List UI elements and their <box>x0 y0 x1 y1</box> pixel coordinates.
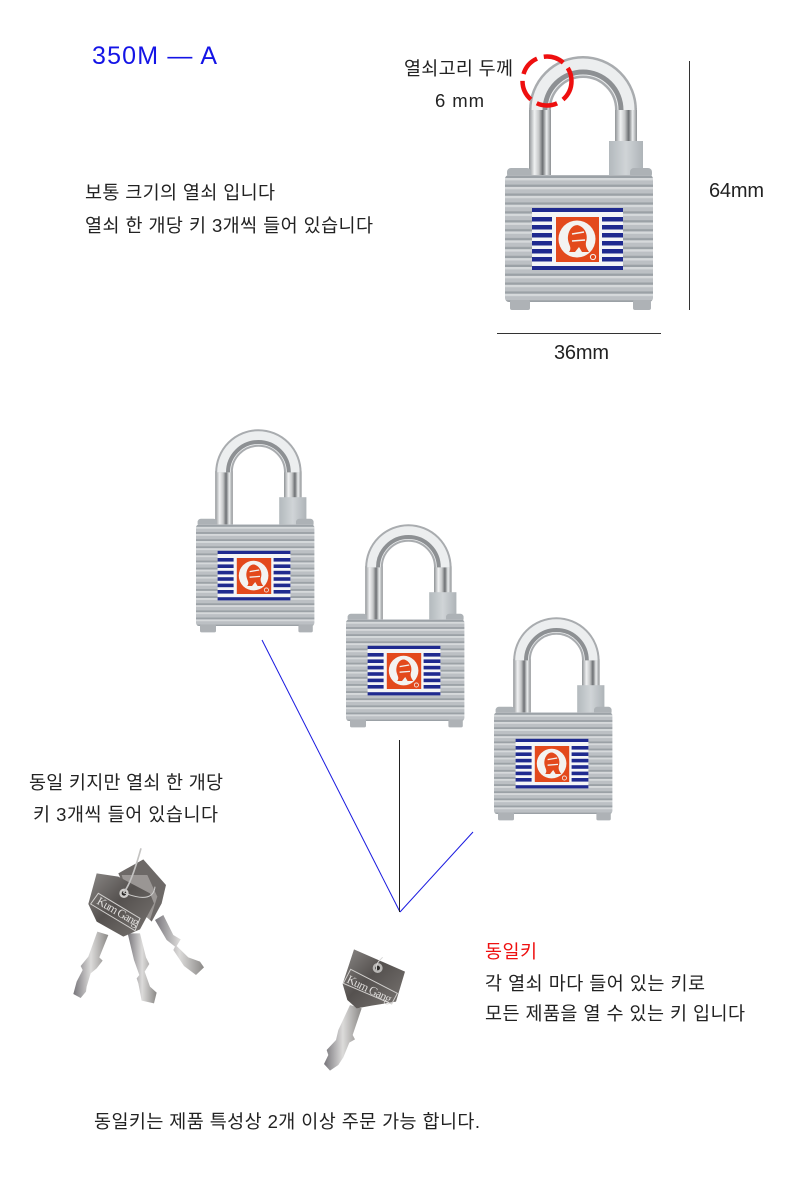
icon: padlock left <box>196 438 314 632</box>
text block: keyed-alike definition <box>485 941 745 1024</box>
dimension: height 64mm: 64mm <box>709 180 764 202</box>
footer note: 동일키는 제품 특성상 2개 이상 주문 가능 합니다. <box>94 1111 480 1132</box>
title: 350M — A <box>92 42 217 70</box>
text block: keyed-alike definition: 동일키 <box>485 941 537 962</box>
icon: single key <box>324 949 405 1071</box>
icon: padlock center <box>346 533 464 727</box>
callout: red dashed circle <box>522 56 572 106</box>
text block: description <box>85 182 373 236</box>
label: shackle thickness <box>404 58 513 111</box>
icon: bundle of three keys: Kum Gang <box>94 894 142 929</box>
text block: keyed-alike note: 키 3개씩 들어 있습니다 <box>33 804 218 825</box>
text block: description: 열쇠 한 개당 키 3개씩 들어 있습니다 <box>85 215 373 236</box>
label: shackle thickness: 열쇠고리 두께 <box>404 58 513 79</box>
text block: description: 보통 크기의 열쇠 입니다 <box>85 182 275 203</box>
text block: keyed-alike note <box>29 772 223 825</box>
text block: keyed-alike note: 동일 키지만 열쇠 한 개당 <box>29 772 223 793</box>
text block: keyed-alike definition: 각 열쇠 마다 들어 있는 키로 <box>485 973 705 994</box>
dimension: width 36mm: 36mm <box>554 342 609 364</box>
icon: large padlock <box>505 67 653 310</box>
icon: padlock right <box>494 626 612 820</box>
text block: keyed-alike definition: 모든 제품을 열 수 있는 키 입니다 <box>485 1003 745 1024</box>
connector lines <box>262 640 473 912</box>
label: shackle thickness: 6 mm <box>435 90 484 111</box>
icon: bundle of three keys <box>73 848 204 1003</box>
icon: single key: Kum Gang <box>345 972 394 1006</box>
